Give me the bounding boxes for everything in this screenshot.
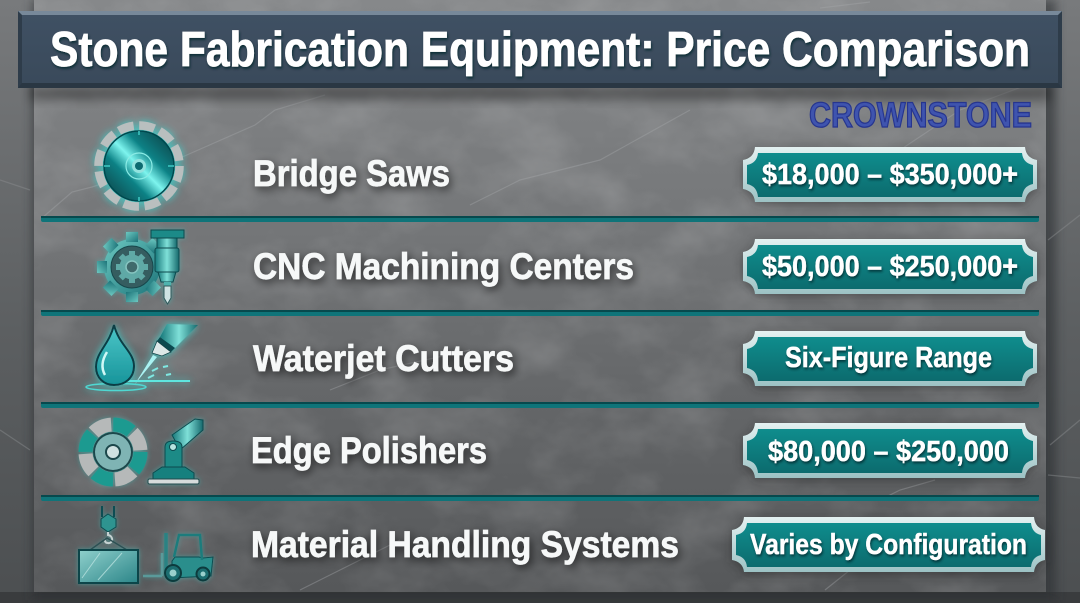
label: Edge Polishers: Edge Polishers <box>251 430 487 471</box>
price plaque: CNC machining centers <box>743 239 1037 296</box>
icon: diamond saw blade <box>98 126 180 206</box>
icon: water drop and jet nozzle <box>86 324 198 390</box>
icon: polishing disc and edge polisher <box>86 419 203 484</box>
price plaque: bridge saws: $18,000 – $350,000+ <box>762 159 1018 191</box>
logo: CROWNSTONE: CROWNSTONE <box>809 96 1032 135</box>
price plaque: material handling systems: Varies by Configuration <box>750 529 1027 561</box>
label: Waterjet Cutters: Waterjet Cutters <box>253 338 514 379</box>
label: Bridge Saws: Bridge Saws <box>253 153 450 194</box>
price plaque: bridge saws <box>743 147 1037 204</box>
row dividers <box>41 216 1039 501</box>
icon: CNC gear and spindle <box>97 230 184 304</box>
label: CNC Machining Centers: CNC Machining Centers <box>253 246 634 287</box>
price plaque: CNC machining centers: $50,000 – $250,000+ <box>762 251 1018 283</box>
price plaque: material handling systems <box>732 517 1045 575</box>
price plaque: waterjet cutters <box>743 331 1037 388</box>
title bar <box>18 11 1062 100</box>
label: Material Handling Systems: Material Handling Systems <box>251 524 679 565</box>
price plaque: waterjet cutters: Six-Figure Range <box>785 342 992 374</box>
price plaque: edge polishers <box>743 423 1037 480</box>
icon: crane hook with slab and forklift <box>79 506 213 583</box>
price plaque: edge polishers: $80,000 – $250,000 <box>768 436 1009 468</box>
